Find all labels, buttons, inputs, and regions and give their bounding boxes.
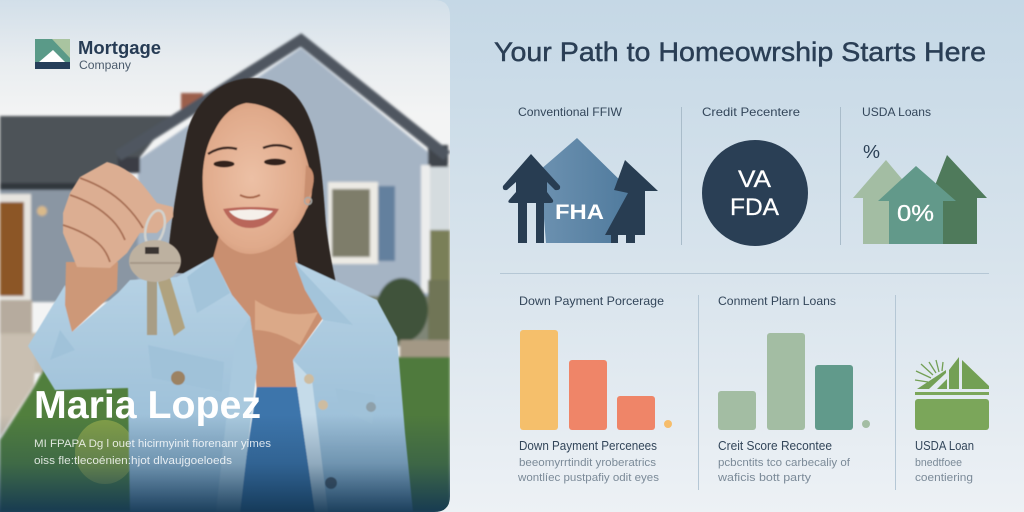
logo wordmark: [78, 38, 161, 72]
agent description: [34, 438, 272, 467]
caption: credit score: Creit Score Recontee: [718, 439, 832, 453]
brows and eyes: [208, 148, 237, 154]
agent description: oiss fle:tlecoénien:hjot dlvaujgoeloeds: [34, 455, 233, 467]
jacket right body: [293, 262, 413, 512]
title: Your Path to Homeowrship Starts Here: [494, 37, 986, 67]
caption: down payment: beeomyrrtindit yroberatrics: [519, 457, 657, 469]
blue top: [238, 387, 315, 512]
icon: VA FDA circle: [702, 140, 808, 246]
logo: [35, 38, 161, 72]
chart heading: loans: Conment Plarn Loans: [718, 294, 836, 308]
jacket collars: [187, 257, 230, 313]
caption: down payment: wontlíec pustpafiy odit eyes: [517, 472, 660, 484]
person: [28, 78, 413, 512]
icon: FHA house with trees: FHA: [555, 201, 604, 224]
bar chart: down payment: [520, 330, 672, 430]
bar chart: credit score: [718, 333, 870, 430]
icon: USDA green houses: [853, 142, 987, 244]
hair: [167, 78, 338, 292]
caption: down payment: [517, 439, 660, 484]
caption: USDA loan: USDA Loan: [915, 439, 974, 453]
icon: house logo mark: [35, 39, 70, 69]
panel: loan types: [503, 105, 987, 246]
logo wordmark: Company: [79, 58, 131, 72]
keys: [129, 208, 185, 336]
icon: USDA green houses: %: [863, 142, 880, 162]
caption: credit score: waficis bott party: [717, 472, 812, 484]
photo panel: agent holding keys in front of house: [0, 0, 450, 512]
bottom fade overlay: [0, 415, 450, 512]
smile: [223, 207, 279, 228]
jacket left body and sleeve: [28, 257, 257, 512]
caption: credit score: pcbcntits tco carbecaliy of: [718, 457, 851, 469]
caption: credit score: [717, 439, 851, 484]
agent name: Maria Lopez: [34, 384, 261, 427]
jacket placket and seams: [220, 326, 258, 492]
loan heading: USDA: USDA Loans: [862, 105, 931, 119]
decorative green circle: [75, 420, 135, 484]
loan heading: conventional: Conventional FFIW: [518, 105, 623, 119]
chart heading: down payment: Down Payment Porcerage: [519, 294, 664, 308]
panel: charts: [517, 294, 989, 490]
house background: [0, 40, 450, 512]
face: [203, 103, 312, 254]
icon: FHA house with trees: [503, 138, 658, 243]
caption: USDA loan: [915, 439, 974, 484]
caption: USDA loan: coentiering: [915, 472, 973, 484]
caption: down payment: Down Payment Percenees: [519, 439, 657, 453]
neck and chest: [213, 225, 323, 392]
jacket buttons: [171, 371, 185, 385]
icon: USDA land and sun: [915, 357, 989, 430]
logo wordmark: Mortgage: [78, 38, 161, 58]
icon: VA FDA circle: FDA: [730, 194, 779, 221]
agent description: MI FPAPA Dg l ouet hicirmyinit fiorenanr yimes: [34, 438, 272, 450]
icon: USDA green houses: 0%: [897, 200, 934, 226]
caption: USDA loan: bnedtfoee: [915, 457, 962, 469]
icon: VA FDA circle: VA: [738, 166, 771, 193]
loan heading: credit: Credit Pecentere: [702, 105, 800, 119]
forearm and hand: [65, 262, 118, 332]
